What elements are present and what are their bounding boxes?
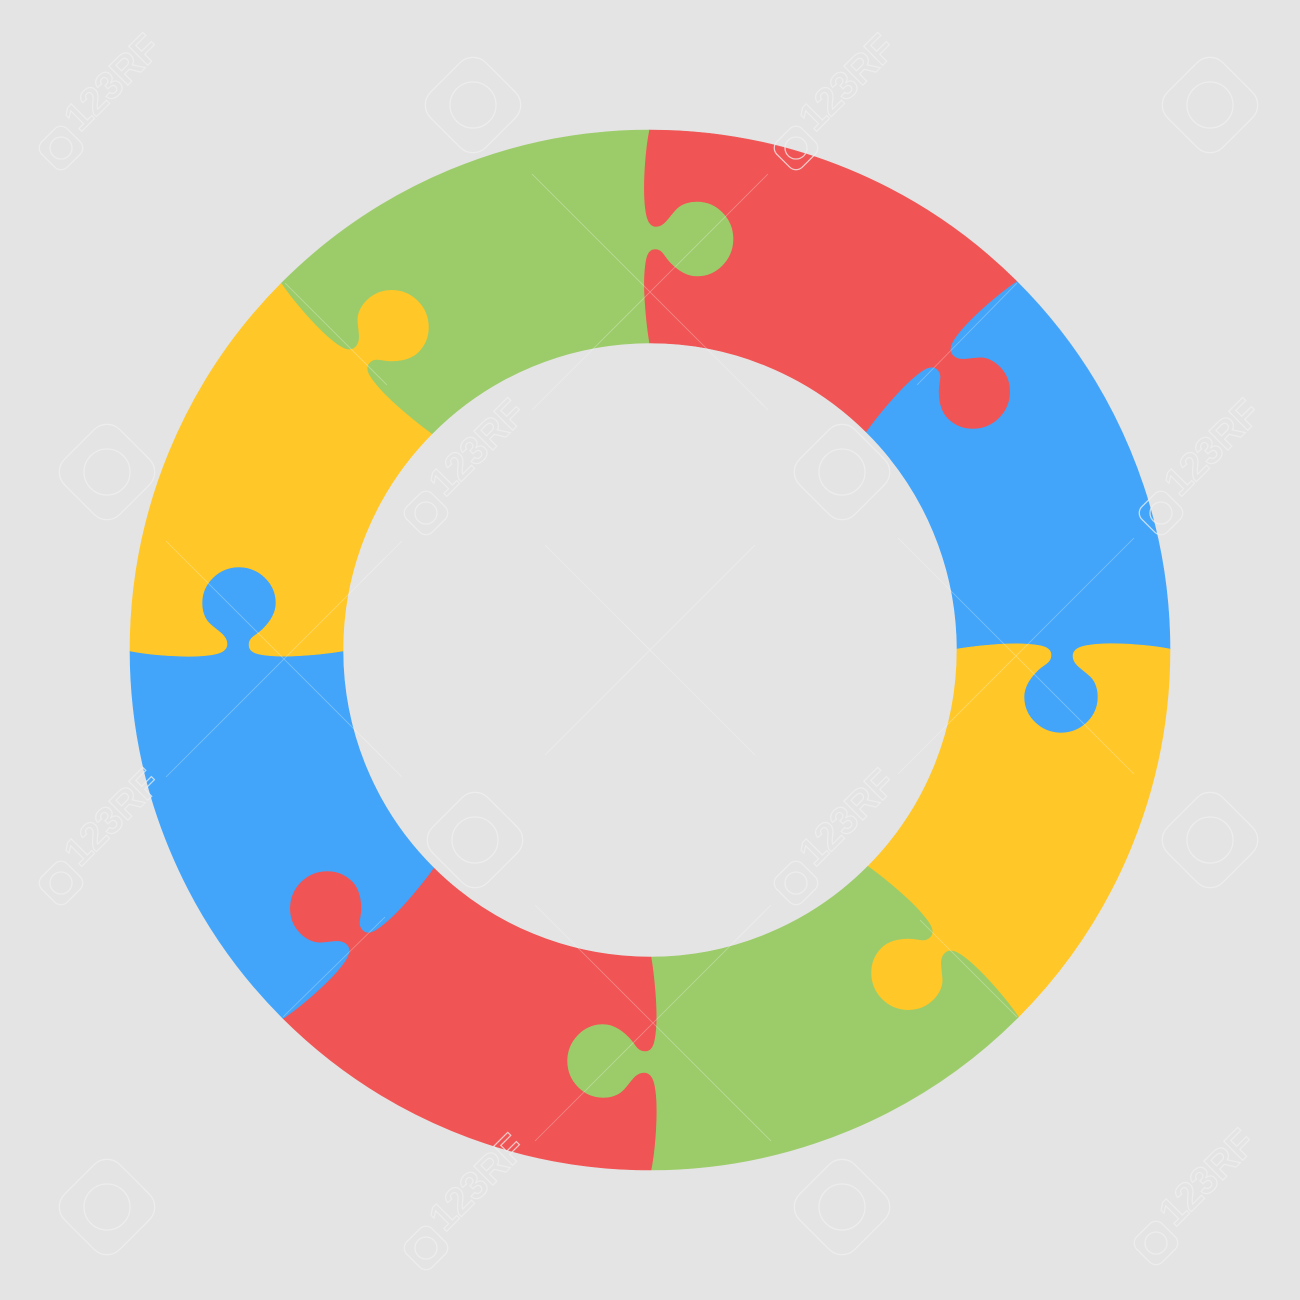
watermark: text stamp 8: 123RF: [1151, 1121, 1264, 1234]
watermark: text stamp 3: [401, 391, 534, 538]
watermark: text stamp 6: 123RF: [791, 761, 904, 874]
piece 2: blue, right: [800, 278, 1277, 756]
watermark: text stamp 4: [1136, 391, 1269, 538]
watermark: text stamp 7: [401, 1126, 534, 1273]
watermark: badge 8: [787, 1152, 897, 1262]
watermark: badge 6: [1155, 785, 1265, 895]
piece 4: green, bottom right: [544, 800, 1022, 1277]
watermark: text stamp 5: 123RF: [56, 761, 169, 874]
piece 6: blue, left: [23, 544, 500, 1022]
watermark: text stamp 1: [36, 26, 169, 173]
piece 5: red, bottom left: [283, 868, 656, 1170]
watermark: text stamp 8: [1131, 1121, 1264, 1268]
watermark: text stamp 2: [771, 26, 904, 173]
watermark: badge 3: [52, 417, 162, 527]
watermark: badge 5: [420, 785, 530, 895]
piece 3: yellow, lower right: [868, 644, 1170, 1017]
watermark: badge 7: [52, 1152, 162, 1262]
watermark: text stamp 5: [36, 761, 169, 908]
piece 8: green, top left: [278, 23, 756, 500]
watermark: badge 4: [787, 417, 897, 527]
watermark: text stamp 7: 123RF: [421, 1126, 534, 1239]
watermark: badge 1: [418, 50, 528, 160]
watermark: text stamp 1: 123RF: [56, 26, 169, 139]
piece 7: yellow, upper left: [130, 283, 432, 656]
piece 1: red, upper right: [644, 130, 1017, 432]
watermark: text stamp 3: 123RF: [421, 391, 534, 504]
watermark: text stamp 2: 123RF: [791, 26, 904, 139]
watermark: badge 2: [1155, 50, 1265, 160]
watermark: text stamp 6: [771, 761, 904, 908]
watermark: text stamp 4: 123RF: [1156, 391, 1269, 504]
